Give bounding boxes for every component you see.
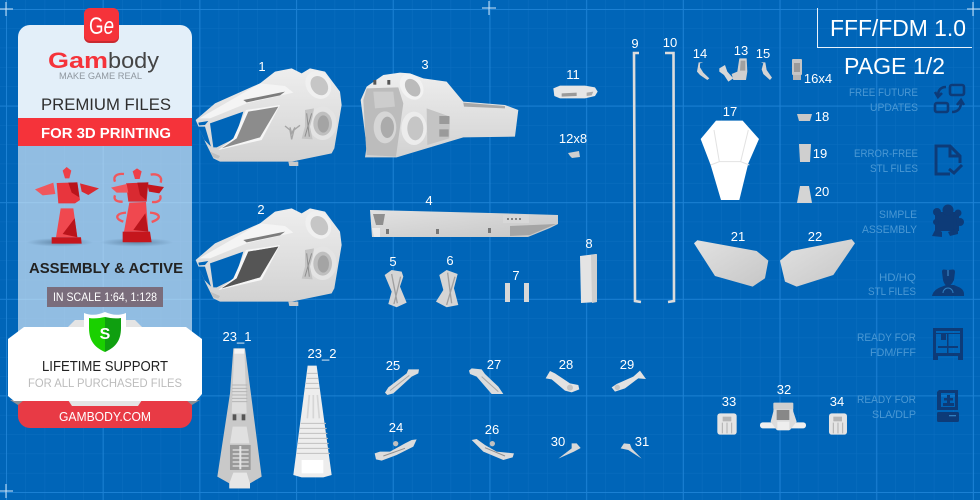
icon: puzzle piece (932, 204, 964, 237)
part 18 (797, 114, 812, 121)
feature: ready for FDM/FFF: READY FOR (857, 332, 916, 344)
feature: ready for SLA/DLP (857, 390, 959, 422)
part number labels: 9 (631, 36, 639, 51)
feature: HD/HQ STL files: STL FILES (868, 286, 916, 298)
brand wordmark: body (108, 48, 159, 73)
part number labels: 24 (389, 420, 403, 435)
brand wordmark: MAKE GAME REAL (59, 71, 142, 82)
part number labels: 15 (756, 46, 770, 61)
part number labels: 6 (446, 253, 454, 268)
part number labels: 31 (635, 434, 649, 449)
part 3 (361, 69, 518, 157)
heading: premium files: PREMIUM FILES (41, 95, 171, 114)
part number labels: 18 (815, 109, 829, 124)
version box (818, 8, 972, 48)
part 11 (553, 86, 598, 98)
heading: assembly and active: ASSEMBLY & ACTIVE (29, 260, 183, 277)
version box: FFF/FDM 1.0 (830, 15, 966, 41)
part 2 (196, 206, 342, 306)
part 13 (719, 58, 747, 82)
banner: for 3D printing: FOR 3D PRINTING (41, 125, 171, 142)
part 5 (385, 270, 407, 307)
part 33 (717, 413, 737, 435)
parts 24 to 31: arms and legs (375, 368, 646, 461)
part 20 (797, 186, 812, 203)
part number labels: 30 (551, 434, 565, 449)
red footer: website (18, 400, 192, 428)
part 9 (634, 53, 641, 302)
part 23_1 (217, 348, 262, 488)
feature: ready for FDM/FFF: FDM/FFF (870, 347, 916, 359)
part number labels: 20 (815, 184, 829, 199)
feature: HD/HQ STL files (868, 270, 964, 298)
ribbon: lifetime support: LIFETIME SUPPORT (42, 359, 168, 375)
part 26 (472, 439, 514, 460)
part number labels: 12x8 (559, 131, 587, 146)
part 34 (829, 413, 847, 435)
part number labels: 33 (722, 394, 736, 409)
part 31 (621, 443, 642, 459)
part 22 (780, 239, 855, 287)
banner: for 3D printing (18, 118, 192, 146)
icon: green shield (84, 312, 126, 356)
part number labels: 23_1 (223, 329, 251, 344)
card translucent middle (18, 146, 192, 336)
page number: PAGE 1/2 (844, 53, 945, 79)
part number labels: 13 (734, 43, 748, 58)
part number labels: 17 (723, 104, 737, 119)
part 15 (761, 62, 772, 80)
feature: free future updates: UPDATES (870, 102, 918, 114)
icon: armoured bust (932, 270, 964, 296)
part number labels: 3 (421, 57, 429, 72)
part 27 (469, 368, 503, 394)
feature: simple assembly: ASSEMBLY (862, 224, 918, 236)
feature: error-free STL files: ERROR-FREE (854, 148, 918, 160)
icon: red assembly figure (27, 167, 99, 247)
icon: checked document (936, 146, 962, 174)
logo badge (84, 8, 119, 43)
feature: ready for SLA/DLP: READY FOR (857, 394, 916, 406)
part number labels (223, 35, 844, 449)
part number labels: 26 (485, 422, 499, 437)
part number labels: 28 (559, 357, 573, 372)
part 30 (558, 443, 581, 459)
part number labels: 29 (620, 357, 634, 372)
part number labels: 14 (693, 46, 707, 61)
part 6 (436, 270, 458, 307)
part 21 (694, 240, 768, 287)
part 16 (792, 59, 802, 80)
part 14 (697, 62, 709, 80)
brand wordmark: Gam (48, 48, 108, 73)
part number labels: 22 (808, 229, 822, 244)
part number labels: 7 (512, 268, 520, 283)
icon: SLA printer (937, 390, 959, 422)
part 7 (505, 283, 529, 302)
feature: simple assembly (862, 204, 964, 237)
part 23_2 (293, 366, 332, 477)
part number labels: 10 (663, 35, 677, 50)
part 19 (799, 144, 811, 162)
part 32 (760, 403, 806, 430)
part 4 (370, 210, 558, 237)
part 28 (546, 371, 579, 392)
part number labels: 11 (566, 67, 580, 82)
part number labels: 1 (258, 59, 266, 74)
part 10 (665, 53, 674, 302)
feature: HD/HQ STL files: HD/HQ (879, 272, 916, 284)
feature: free future updates: FREE FUTURE (849, 87, 918, 99)
part number labels: 5 (389, 254, 397, 269)
part number labels: 27 (487, 357, 501, 372)
part number labels: 25 (386, 358, 400, 373)
part number labels: 16x4 (804, 71, 832, 86)
part 25 (385, 369, 419, 395)
part 8 (580, 254, 597, 303)
icon: FDM printer (933, 328, 963, 360)
panel: product card (8, 8, 202, 428)
part 12 (568, 151, 580, 158)
part 1 (196, 66, 342, 166)
part 17 (701, 121, 759, 200)
feature: simple assembly: SIMPLE (879, 209, 917, 221)
red footer: website: GAMBODY.COM (59, 409, 151, 424)
card top panel (18, 25, 192, 118)
part number labels: 8 (585, 236, 593, 251)
icon: red articulated figure with arrows (100, 168, 173, 247)
part number labels: 21 (731, 229, 745, 244)
ribbon: lifetime support: FOR ALL PURCHASED FILES (28, 376, 182, 390)
feature: error-free STL files: STL FILES (870, 163, 918, 175)
feature: ready for FDM/FFF (857, 328, 963, 360)
feature: error-free STL files (854, 146, 962, 175)
icon: green shield: S (100, 326, 111, 343)
brand wordmark (48, 48, 159, 82)
logo badge: Ge (89, 13, 114, 40)
ribbon: lifetime support (8, 312, 202, 406)
scale tag (47, 287, 163, 307)
part number labels: 23_2 (308, 346, 336, 361)
part number labels: 32 (777, 382, 791, 397)
scale tag: IN SCALE 1:64, 1:128 (53, 292, 157, 304)
part number labels: 34 (830, 394, 844, 409)
feature: free future updates (849, 85, 964, 114)
part 29 (612, 371, 646, 392)
part number labels: 19 (813, 146, 827, 161)
icon: updates (935, 85, 964, 112)
part number labels: 2 (257, 202, 265, 217)
part 24 (375, 439, 417, 461)
feature: ready for SLA/DLP: SLA/DLP (872, 409, 916, 421)
part number labels: 4 (425, 193, 433, 208)
